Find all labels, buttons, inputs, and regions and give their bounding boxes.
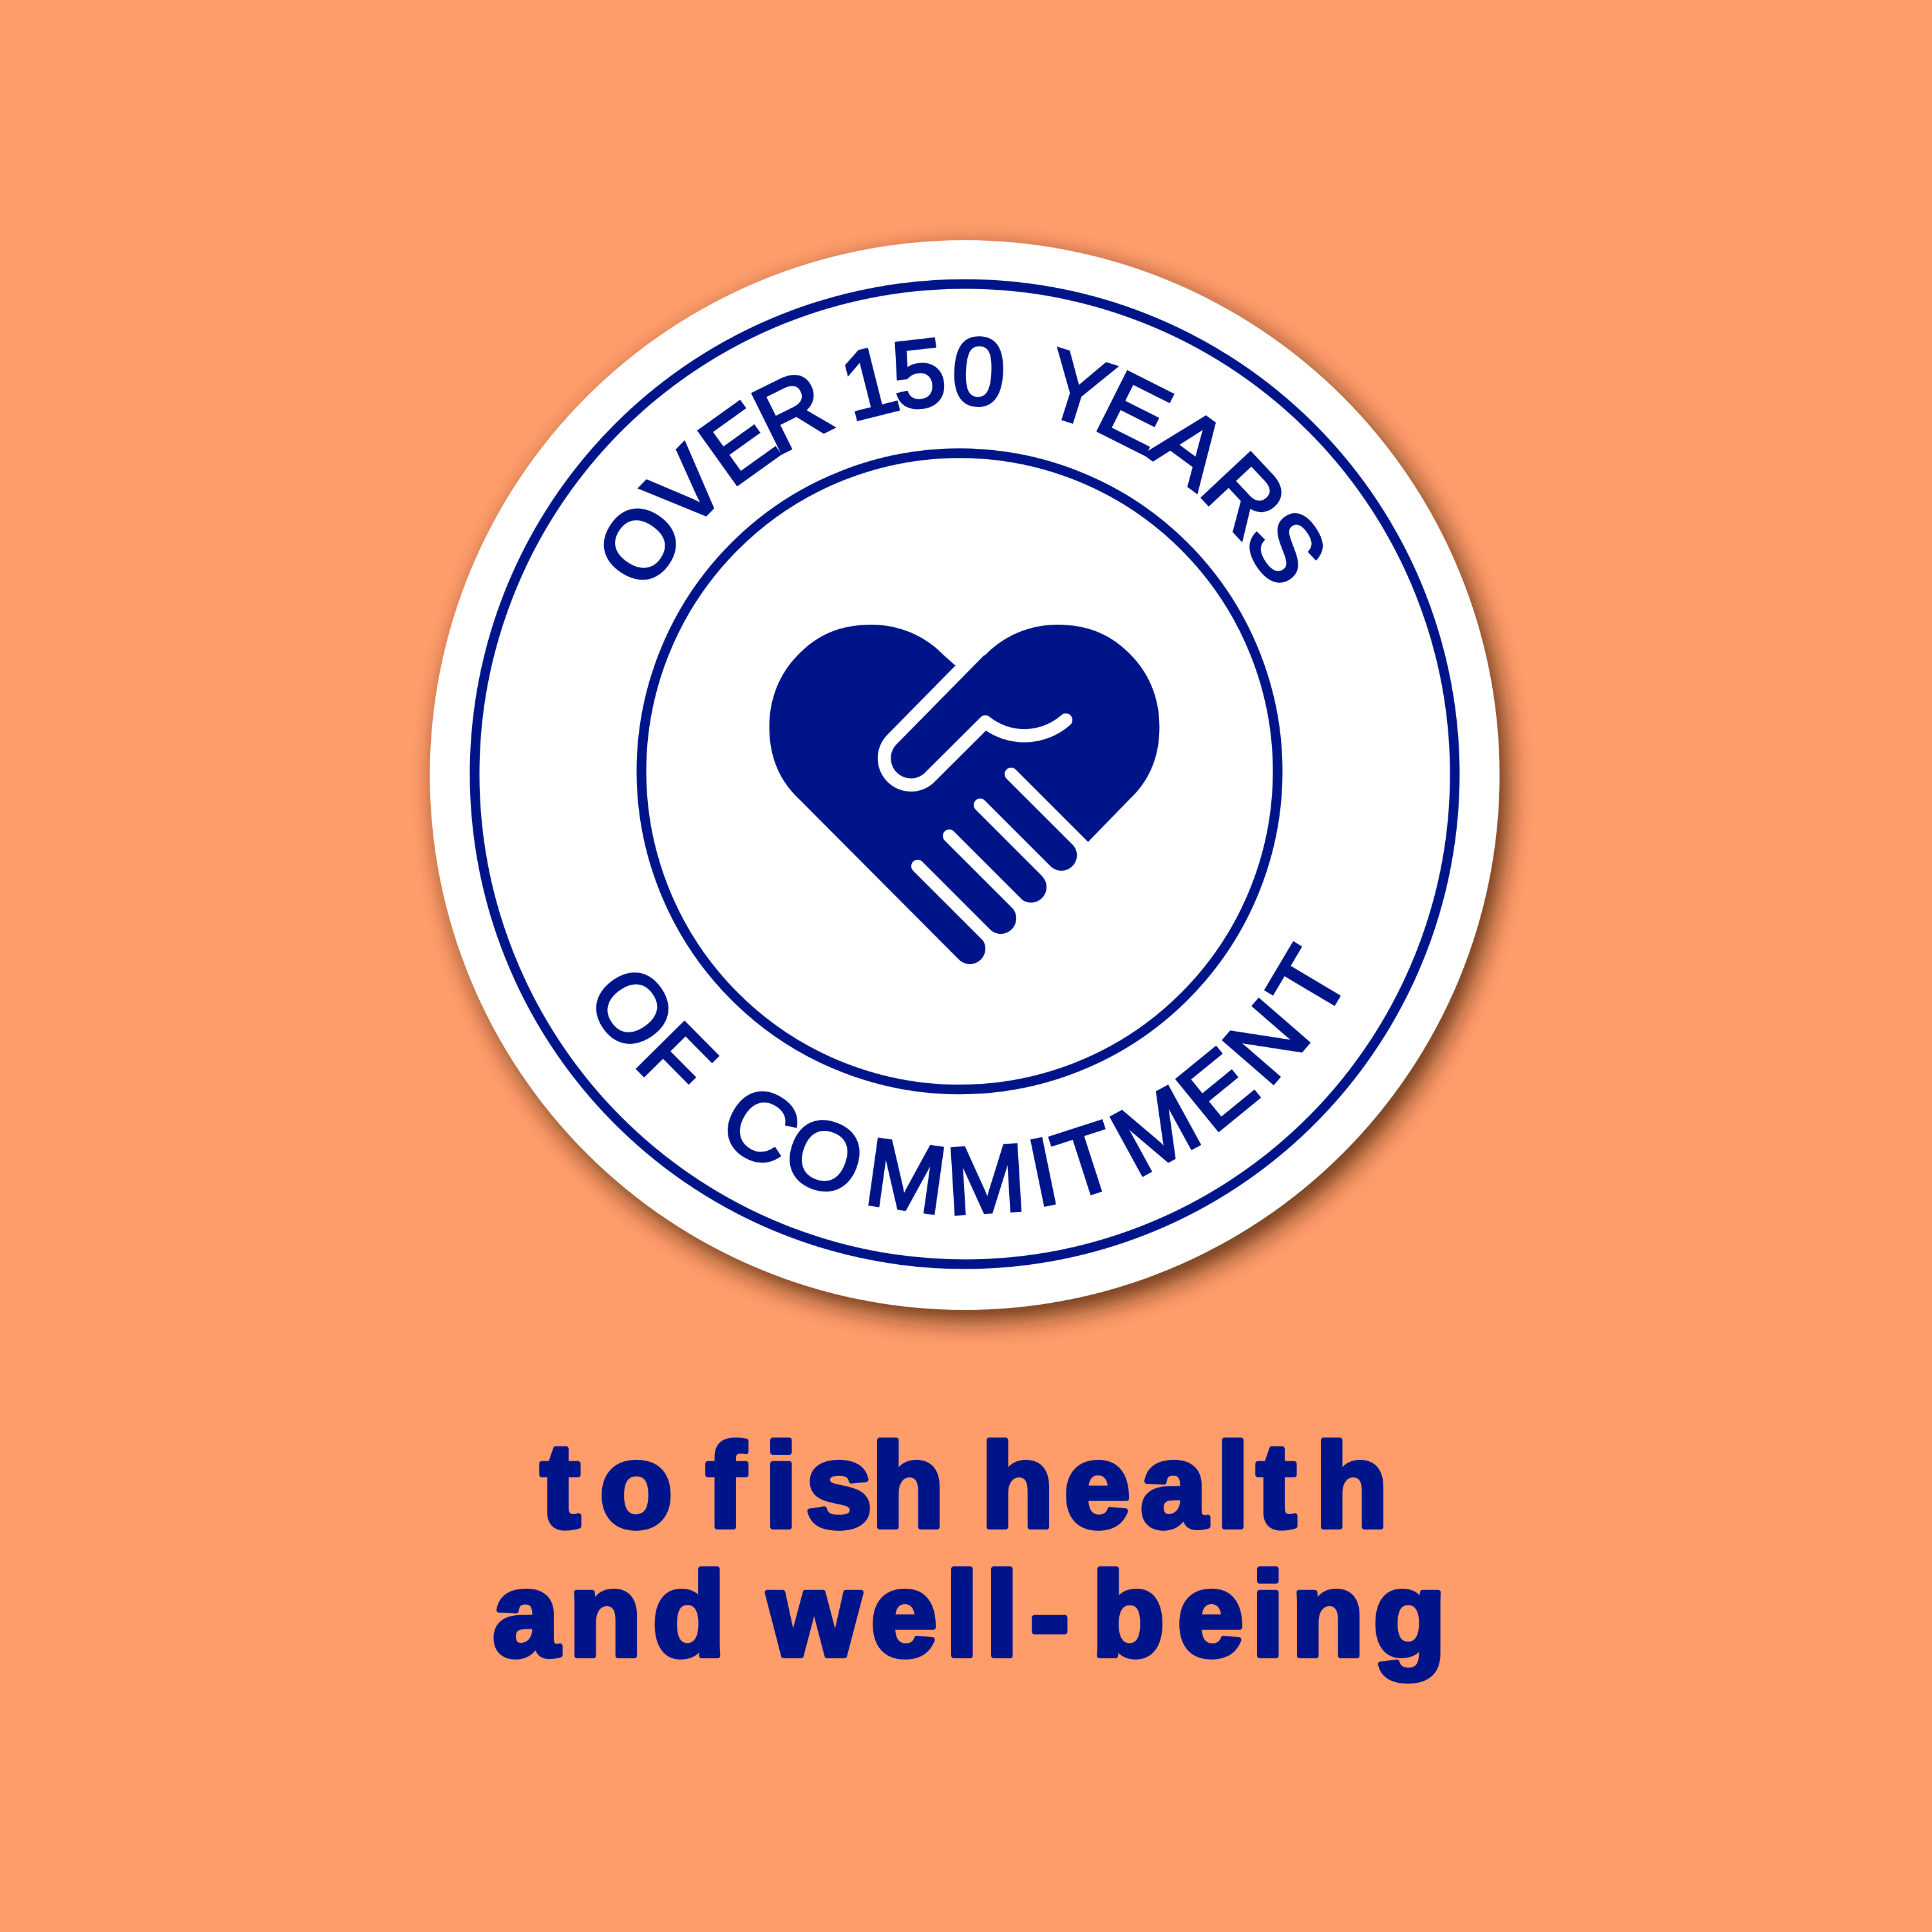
inner ring — [641, 453, 1278, 1090]
badge white disc — [430, 240, 1499, 1310]
tagline line 1: to fish health — [540, 1419, 1388, 1553]
badge — [417, 229, 1526, 1336]
outer ring — [475, 284, 1455, 1264]
curved text: over 150 years: OVER 150 YEARS — [604, 336, 1323, 583]
tagline line 2: and well-being — [493, 1548, 1446, 1681]
icon: heart formed by clasped hands — [770, 625, 1159, 964]
tagline — [493, 1419, 1446, 1681]
handshake outline — [884, 649, 1066, 785]
heart silhouette with fingers — [770, 625, 1159, 964]
curved text: of commitment: OF COMMITMENT — [596, 941, 1341, 1216]
finger gaps — [918, 774, 1088, 943]
